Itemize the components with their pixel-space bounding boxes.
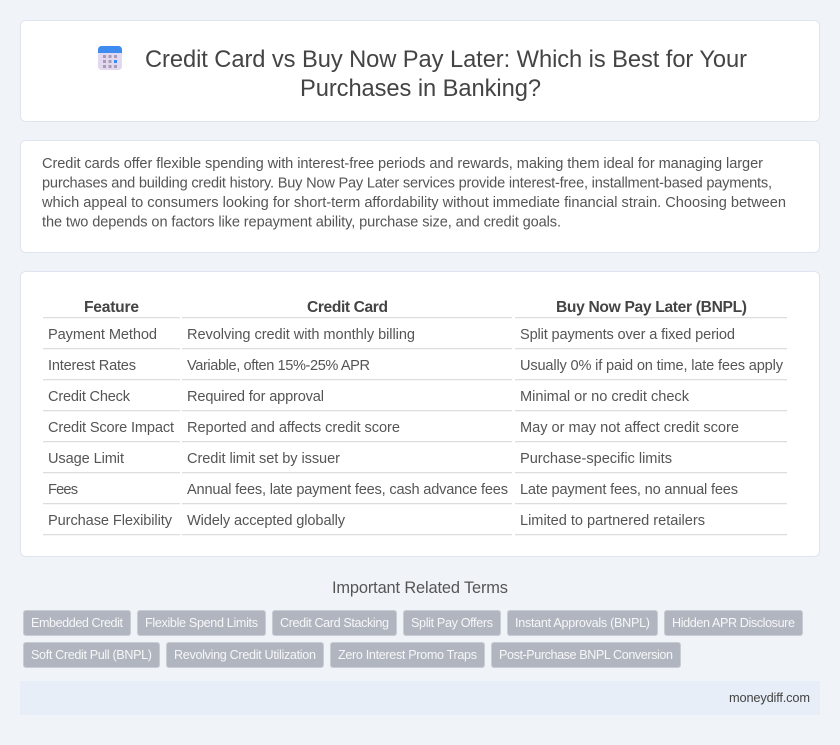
icon: calendar <box>98 46 122 70</box>
row: usage limit: Credit limit set by issuer <box>187 451 340 467</box>
heading: related terms: Important Related Terms <box>332 579 508 597</box>
row: credit check: Required for approval <box>187 389 324 405</box>
row: fees: Annual fees, late payment fees, cash advance fees <box>187 482 508 498</box>
row: purchase flexibility: Widely accepted globally <box>187 513 346 529</box>
row: purchase flexibility: Limited to partnered retailers <box>520 513 705 529</box>
related term chips: Soft Credit Pull (BNPL) <box>31 648 152 662</box>
row: interest rates: Interest Rates <box>48 358 136 374</box>
panel: introduction <box>20 140 820 252</box>
row: purchase flexibility <box>48 513 705 529</box>
row: credit check: Credit Check <box>48 389 131 405</box>
row: interest rates <box>48 358 784 374</box>
table header: Buy Now Pay Later (BNPL) <box>556 299 747 316</box>
row: usage limit <box>48 451 672 467</box>
row: credit score impact: May or may not affect credit score <box>520 420 739 436</box>
table header: Credit Card <box>307 299 388 316</box>
related term chips: Zero Interest Promo Traps <box>338 648 477 662</box>
related term chips: Split Pay Offers <box>411 616 493 630</box>
row: payment method: Revolving credit with monthly billing <box>187 327 415 343</box>
row: fees: Late payment fees, no annual fees <box>520 482 738 498</box>
row: credit score impact: Credit Score Impact <box>48 420 174 436</box>
related term chips: Instant Approvals (BNPL) <box>515 616 650 630</box>
panel: comparison table <box>20 272 820 556</box>
row: payment method: Payment Method <box>48 327 157 343</box>
title: Credit Card vs Buy Now Pay Later: Which is Best for Your <box>145 47 747 73</box>
title: Purchases in Banking? <box>300 76 541 102</box>
related term chips <box>24 610 802 668</box>
intro paragraph: the two depends on factors like repayment ability, purchase size, and credit goals. <box>42 214 561 230</box>
row: usage limit: Purchase-specific limits <box>520 451 672 467</box>
row: fees: Fees <box>48 482 78 498</box>
related term chips: Embedded Credit <box>31 616 124 630</box>
related term chips: Post-Purchase BNPL Conversion <box>499 648 673 662</box>
row: credit score impact <box>48 420 739 436</box>
row: payment method: Split payments over a fixed period <box>520 327 735 343</box>
footer <box>20 681 820 715</box>
row: interest rates: Usually 0% if paid on time, late fees apply <box>520 358 784 374</box>
row: usage limit: Usage Limit <box>48 451 124 467</box>
related term chips: Flexible Spend Limits <box>145 616 258 630</box>
table header <box>84 299 747 316</box>
intro paragraph: which appeal to consumers looking for short-term affordability without immediate financial strain. Choosing between <box>41 195 786 211</box>
row: purchase flexibility: Purchase Flexibility <box>48 513 173 529</box>
related term chips: Hidden APR Disclosure <box>672 616 795 630</box>
title <box>145 47 747 102</box>
related term chips: Revolving Credit Utilization <box>174 648 316 662</box>
footer: moneydiff.com <box>729 690 810 705</box>
intro paragraph <box>41 156 786 230</box>
row: payment method <box>48 327 735 343</box>
row: fees <box>48 482 738 498</box>
row: credit score impact: Reported and affects credit score <box>187 420 400 436</box>
row: credit check: Minimal or no credit check <box>520 389 690 405</box>
panel: title header <box>20 20 820 122</box>
table header: Feature <box>84 299 139 316</box>
intro paragraph: Credit cards offer flexible spending with interest-free periods and rewards, making them ideal for managing larger <box>42 156 763 172</box>
related term chips: Credit Card Stacking <box>280 616 389 630</box>
row: interest rates: Variable, often 15%-25% APR <box>187 358 370 374</box>
intro paragraph: purchases and building credit history. Buy Now Pay Later services provide interest-free, installment-based payments, <box>42 176 772 192</box>
row: credit check <box>48 389 690 405</box>
